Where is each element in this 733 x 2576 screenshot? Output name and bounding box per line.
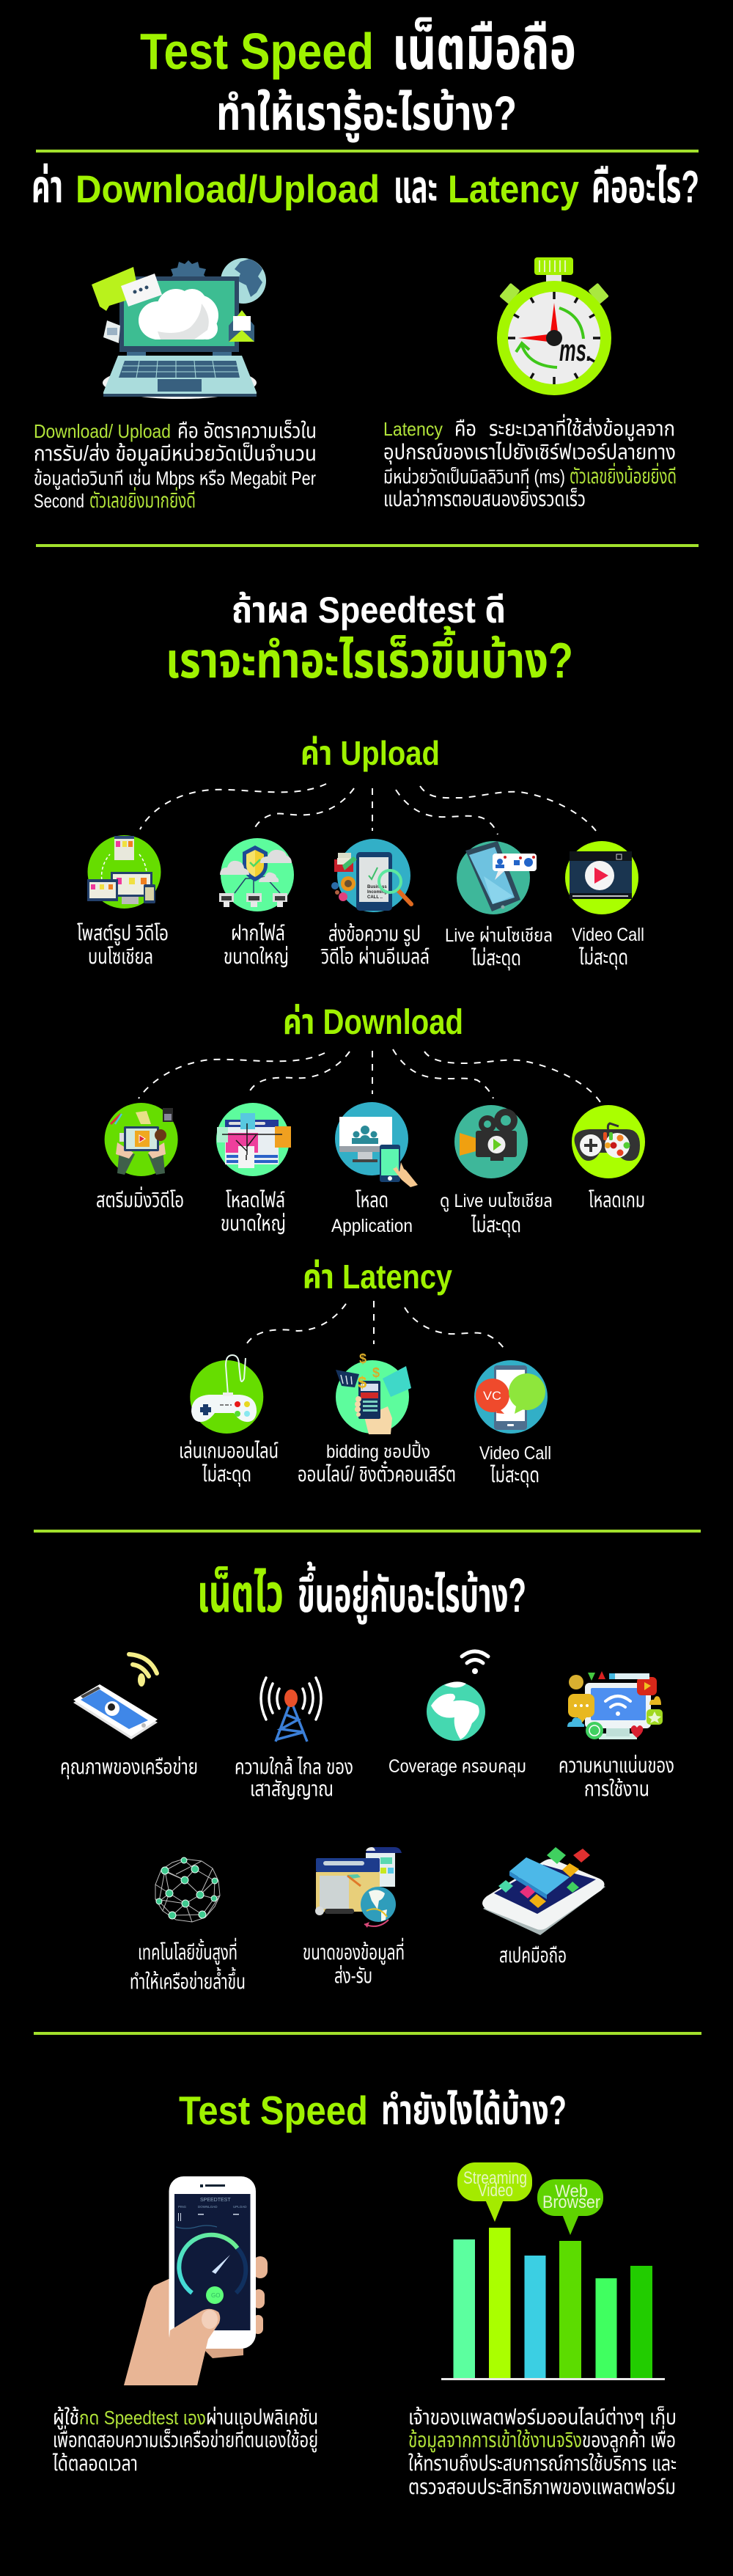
- text block: download upload definition: [34, 419, 317, 513]
- labels: factors row 2: ขนาดของข้อมูลที่: [303, 1937, 405, 1965]
- title: Test Speed: [140, 23, 374, 80]
- heading: latency: ค่า Latency: [303, 1258, 452, 1296]
- callout: streaming video: Video: [478, 2181, 513, 2201]
- text block: latency definition: ตัวเลขยิ่งน้อยยิ่งดี: [570, 463, 677, 488]
- callout: web browser: Browser: [542, 2192, 600, 2212]
- icon: live on social: [457, 841, 537, 914]
- icon: file upload shield: [219, 838, 294, 911]
- icon: video streaming: [105, 1103, 178, 1176]
- heading: download: ค่า Download: [283, 1003, 463, 1042]
- text block: latency definition: [383, 414, 677, 511]
- heading: if speedtest is good: [166, 590, 573, 689]
- icon: live video: [454, 1105, 528, 1178]
- labels: latency: Video Call: [479, 1443, 551, 1464]
- labels: upload: ไม่สะดุด: [578, 946, 628, 969]
- callout: streaming video: [457, 2162, 532, 2222]
- heading: download upload latency: ค่า: [32, 162, 63, 213]
- labels: download: ดู Live บนโซเชียล: [440, 1191, 553, 1212]
- heading: fast internet depends on: เน็ตไว: [197, 1565, 284, 1623]
- icon: online shopping: [336, 1351, 411, 1434]
- heading: upload: ค่า Upload: [301, 734, 440, 772]
- icon: large file download: [216, 1103, 291, 1176]
- text block: user initiated test: ผ่านแอปพลิเคชัน: [206, 2406, 318, 2429]
- text block: download upload definition: Download/ Upload: [34, 420, 171, 442]
- heading: if speedtest is good: เราจะทำอะไรเร็วขึ้นบ้าง?: [166, 625, 573, 689]
- labels: download: ไม่สะดุด: [471, 1214, 521, 1237]
- heading: fast internet depends on: ขึ้นอยู่กับอะไรบ้าง?: [298, 1561, 526, 1624]
- text block: user initiated test: กด Speedtest เอง: [79, 2407, 206, 2429]
- labels: upload: ไม่สะดุด: [471, 947, 521, 970]
- labels: upload: ฝากไฟล์: [231, 922, 285, 945]
- text block: platform collected data: เจ้าของแพลตฟอร์มออนไลน์ต่างๆ เก็บ: [408, 2406, 677, 2429]
- icon: network sphere: [155, 1857, 220, 1922]
- icon: hand holding phone with speedtest: UPLOAD: [233, 2205, 247, 2209]
- labels: upload: Video Call: [572, 925, 644, 945]
- chart: platform bars: [441, 2162, 665, 2380]
- labels: factors row 1: ความหนาแน่นของ: [559, 1754, 674, 1777]
- connectors: download: [139, 1049, 600, 1102]
- labels: download: [96, 1186, 645, 1237]
- text block: platform collected data: ข้อมูลจากการเข้าใช้งานจริง: [408, 2429, 582, 2453]
- labels: upload: Live ผ่านโซเชียล: [445, 925, 553, 946]
- labels: download: ขนาดใหญ่: [221, 1212, 286, 1236]
- icon: network density: [567, 1671, 663, 1739]
- text block: download upload definition: ตัวเลขยิ่งมากยิ่งดี: [89, 487, 196, 513]
- text block: download upload definition: ข้อมูลต่อวินาที เช่น Mbps หรือ Megabit Per: [34, 467, 316, 490]
- icon: hand holding phone with speedtest: SPEEDTEST: [200, 2198, 231, 2203]
- labels: factors row 1: Coverage ครอบคลุม: [388, 1756, 526, 1777]
- icon: globe coverage: [427, 1651, 488, 1741]
- icon: hand holding phone with speedtest: [124, 2176, 268, 2385]
- labels: upload: ขนาดใหญ่: [224, 945, 289, 969]
- heading: download upload latency: [32, 162, 699, 213]
- icon: phone specs: [482, 1847, 605, 1935]
- icon: send message and email: Business: [367, 885, 387, 889]
- text block: download upload definition: Second: [34, 490, 84, 512]
- labels: factors row 2: [130, 1937, 567, 1994]
- icon: signal tower: [261, 1678, 321, 1742]
- heading: download upload latency: Download/Upload: [75, 168, 380, 211]
- text block: latency definition: Latency: [383, 418, 443, 440]
- icon: video call bubbles: [474, 1360, 548, 1434]
- text block: platform collected data: ของลูกค้า เพื่อ: [582, 2425, 676, 2453]
- heading: how to test speed: [179, 2087, 567, 2133]
- text block: platform collected data: ตรวจสอบประสิทธิภาพของแพลตฟอร์ม: [408, 2476, 676, 2499]
- icon: stopwatch: [497, 257, 611, 395]
- heading: how to test speed: ทำยังไงได้บ้าง?: [381, 2087, 567, 2133]
- labels: factors row 2: ทำให้เครือข่ายล้ำขึ้น: [130, 1967, 246, 1994]
- icon: video call bubbles: VC: [483, 1389, 501, 1403]
- labels: latency: ออนไลน์/ ชิงตั๋วคอนเสิร์ต: [298, 1461, 456, 1486]
- text block: latency definition: ระยะเวลาที่ใช้ส่งข้อมูลจาก: [489, 414, 675, 441]
- text block: user initiated test: ผู้ใช้: [53, 2406, 79, 2430]
- icon: hand holding phone with speedtest: DOWNLOAD: [198, 2205, 218, 2209]
- labels: upload: [77, 922, 644, 970]
- title: ทำให้เรารู้อะไรบ้าง?: [216, 86, 517, 142]
- labels: upload: วิดีโอ ผ่านอีเมลล์: [321, 945, 430, 969]
- labels: factors row 1: คุณภาพของเครือข่าย: [60, 1755, 198, 1779]
- labels: upload: บนโซเชียล: [88, 945, 153, 969]
- icon: online gaming: [190, 1355, 263, 1434]
- icon: hand holding phone with speedtest: PING: [178, 2205, 187, 2209]
- labels: factors row 1: การใช้งาน: [584, 1777, 649, 1801]
- icon: stopwatch: ms.: [559, 333, 592, 367]
- text block: platform collected data: [408, 2406, 677, 2499]
- labels: latency: [179, 1439, 551, 1487]
- title: [140, 15, 576, 142]
- labels: latency: ไม่สะดุด: [490, 1464, 539, 1487]
- icon: game download: [572, 1105, 645, 1178]
- labels: factors row 2: ส่ง-รับ: [334, 1964, 372, 1988]
- labels: download: Application: [331, 1216, 413, 1236]
- connectors: upload: [140, 784, 596, 834]
- heading: fast internet depends on: [197, 1561, 526, 1624]
- icon: send message and email: CALL ..: [367, 895, 383, 900]
- heading: download upload latency: Latency: [448, 168, 579, 211]
- text block: latency definition: มีหน่วยวัดเป็นมิลลิวินาที (ms): [383, 466, 565, 488]
- labels: factors row 1: [60, 1754, 674, 1801]
- labels: factors row 2: สเปคมือถือ: [499, 1944, 567, 1967]
- text block: user initiated test: เพื่อทดสอบความเร็วเครือข่ายที่ตนเองใช้อยู่: [53, 2425, 318, 2453]
- icon: laptop with cloud: [92, 258, 266, 399]
- icon: video call: [565, 841, 638, 914]
- text block: download upload definition: คือ อัตราความเร็วใน: [177, 419, 317, 443]
- icon: data size: [315, 1847, 402, 1928]
- icon: post photos and video: [87, 835, 161, 909]
- icon: hand holding phone with speedtest: GO: [211, 2292, 220, 2299]
- labels: factors row 1: ความใกล้ ไกล ของ: [235, 1755, 353, 1779]
- labels: factors row 2: เทคโนโลยีขั้นสูงที่: [138, 1937, 237, 1965]
- icon: online shopping: $: [372, 1365, 380, 1380]
- icon: phone with signal: [73, 1654, 158, 1739]
- text block: latency definition: แปลว่าการตอบสนองยิ่งรวดเร็ว: [383, 485, 586, 511]
- labels: latency: เล่นเกมออนไลน์: [179, 1439, 279, 1463]
- heading: how to test speed: Test Speed: [179, 2088, 368, 2133]
- text block: user initiated test: ได้ตลอดเวลา: [52, 2452, 138, 2476]
- labels: download: โหลดเกม: [589, 1189, 645, 1212]
- text block: latency definition: คือ: [454, 417, 476, 441]
- labels: download: สตรีมมิ่งวิดีโอ: [96, 1186, 184, 1212]
- icon: online shopping: $: [358, 1373, 366, 1392]
- connectors: latency: [244, 1301, 506, 1351]
- callout: streaming video: Streaming: [463, 2168, 527, 2188]
- callout: web browser: [537, 2179, 603, 2235]
- heading: download upload latency: และ: [394, 162, 438, 213]
- labels: download: โหลดไฟล์: [226, 1189, 285, 1212]
- icon: send message and email: Incoming: [367, 890, 387, 895]
- labels: upload: โพสต์รูป วิดีโอ: [77, 922, 169, 946]
- text block: download upload definition: การรับ/ส่ง ข้อมูลมีหน่วยวัดเป็นจำนวน: [34, 442, 317, 466]
- labels: upload: ส่งข้อความ รูป: [328, 922, 421, 947]
- labels: factors row 1: เสาสัญญาณ: [250, 1777, 334, 1801]
- text block: latency definition: อุปกรณ์ของเราไปยังเซิร์ฟเวอร์ปลายทาง: [383, 441, 676, 464]
- heading: if speedtest is good: ถ้าผล Speedtest ดี: [232, 590, 506, 631]
- icon: online shopping: $: [359, 1351, 366, 1366]
- icon: send message and email: [331, 839, 411, 912]
- title: เน็ตมือถือ: [392, 15, 576, 82]
- labels: latency: bidding ชอปปิ้ง: [326, 1439, 430, 1462]
- labels: latency: ไม่สะดุด: [202, 1463, 251, 1486]
- callout: web browser: Web: [555, 2181, 588, 2201]
- text block: user initiated test: [52, 2406, 318, 2476]
- labels: download: โหลด: [356, 1189, 388, 1212]
- icon: application download: [335, 1102, 418, 1187]
